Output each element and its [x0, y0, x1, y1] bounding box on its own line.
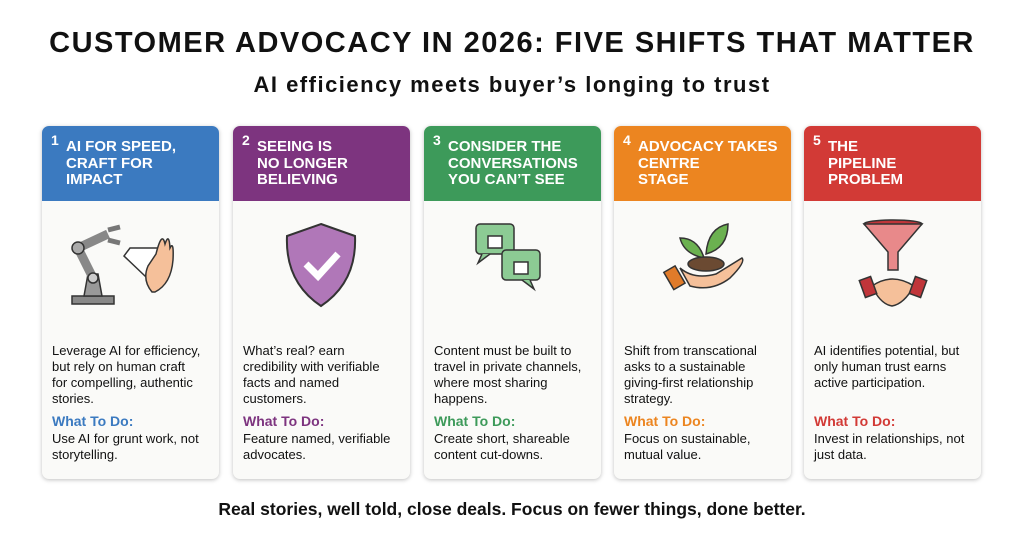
body text 4: Shift from transcational asks to a sustainable giving-first relationship strategy. [624, 343, 757, 406]
body text 2: What’s real? earn credibility with verifiable facts and named customers. [243, 343, 380, 406]
what to do 2: What To Do: [243, 413, 324, 429]
header 1: CRAFT FOR [66, 154, 153, 172]
panel: card 2 [233, 126, 410, 479]
icon: robot arm and diamond [71, 224, 174, 305]
what to do 5: What To Do: [814, 413, 895, 429]
icon: funnel and handshake [858, 219, 928, 307]
header 1 [42, 126, 219, 201]
header 4: ADVOCACY TAKES [638, 138, 777, 155]
title: CUSTOMER ADVOCACY IN 2026: FIVE SHIFTS THAT MATTER [49, 27, 975, 59]
icon: chat bubbles with locks [475, 223, 541, 292]
header 2: SEEING IS [257, 138, 332, 155]
what to do 1: What To Do: [52, 413, 133, 429]
header 1: IMPACT [66, 171, 122, 188]
header 5: PROBLEM [828, 171, 903, 188]
what to do 4: What To Do: [624, 413, 705, 429]
header 5: 5 [813, 132, 821, 148]
header 5: THE [828, 138, 858, 155]
header 3: CONVERSATIONS [448, 154, 578, 172]
icon: hand with sprout [662, 223, 744, 291]
panel: card 1: Use AI for grunt work, not storytelling. [52, 431, 199, 462]
header 3 [424, 126, 601, 201]
panel: card 3 [424, 126, 601, 479]
what to do 3: What To Do: [434, 413, 515, 429]
header 4: 4 [623, 132, 631, 148]
header 2: BELIEVING [257, 171, 338, 188]
panel: card 1 [42, 126, 219, 479]
body text 1: Leverage AI for efficiency, but rely on human craft for compelling, authentic stories. [52, 343, 200, 406]
header 1: AI FOR SPEED, [66, 138, 176, 155]
header 3: CONSIDER THE [448, 138, 561, 155]
body text 5: AI identifies potential, but only human trust earns active participation. [814, 343, 959, 390]
header 4 [614, 126, 791, 201]
footer: Real stories, well told, close deals. Focus on fewer things, done better. [218, 499, 806, 519]
panel: card 3: Create short, shareable content cut-downs. [434, 431, 570, 462]
header 2 [233, 126, 410, 201]
header 2: NO LONGER [257, 154, 348, 172]
icon: shield [286, 223, 356, 308]
panel: card 4 [614, 126, 791, 479]
header 5: PIPELINE [828, 154, 896, 172]
panel: card 2: Feature named, verifiable advocates. [243, 431, 390, 462]
header 5 [804, 126, 981, 201]
panel: card 4: Focus on sustainable, mutual value. [624, 431, 750, 462]
header 4: CENTRE [638, 154, 700, 172]
header 3: YOU CAN’T SEE [448, 171, 565, 188]
header 1: 1 [51, 132, 59, 148]
header 3: 3 [433, 132, 441, 148]
header 2: 2 [242, 132, 250, 148]
panel: card 5: Invest in relationships, not just data. [814, 431, 964, 462]
header 4: STAGE [638, 171, 689, 188]
body text 3: Content must be built to travel in private channels, where most sharing happens. [434, 343, 581, 406]
panel: card 5 [804, 126, 981, 479]
subtitle: AI efficiency meets buyer’s longing to trust [253, 72, 771, 97]
